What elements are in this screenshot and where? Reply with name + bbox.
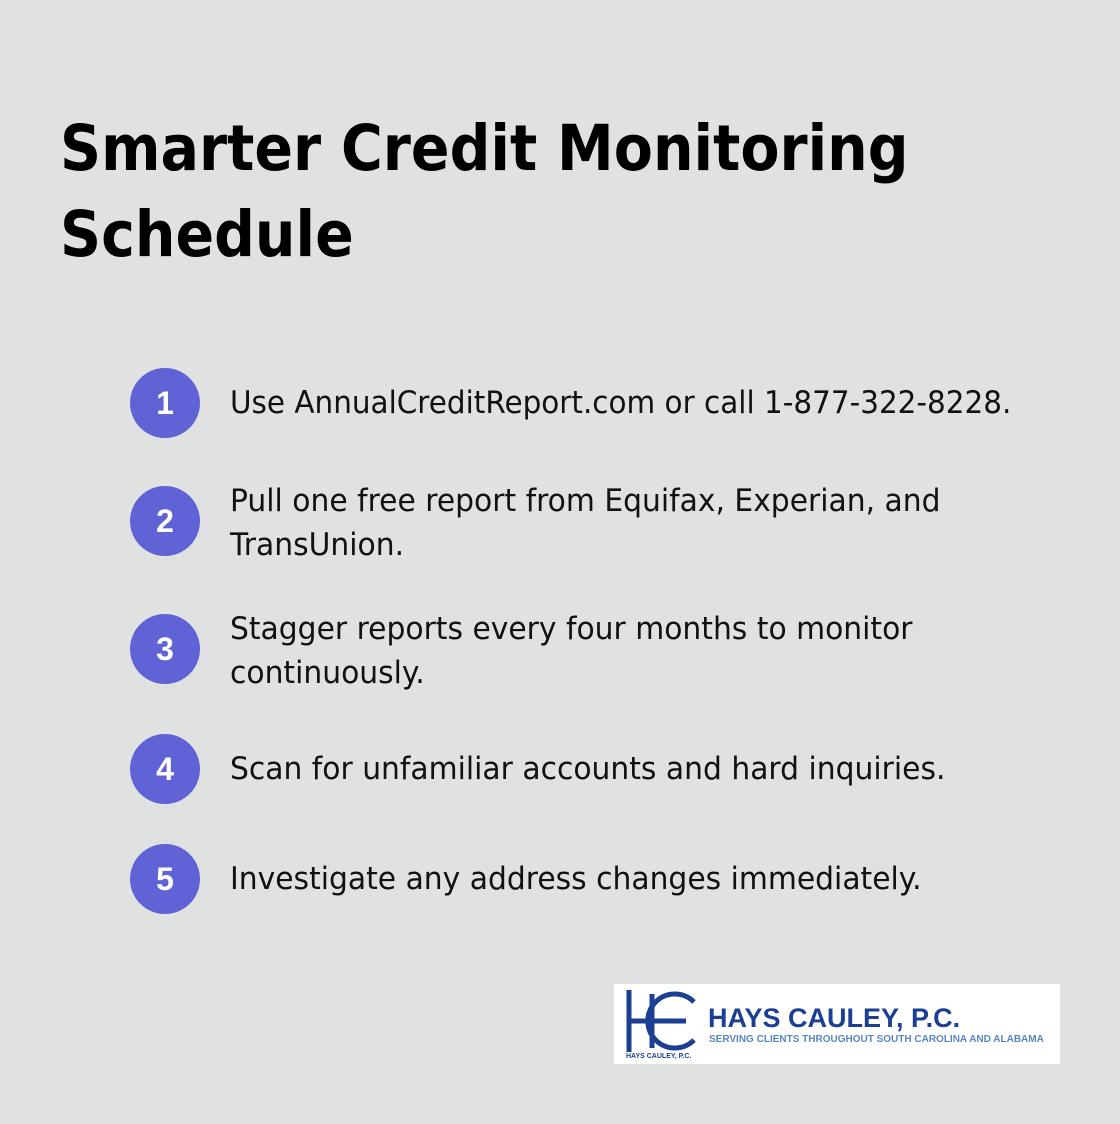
title: Smarter Credit Monitoring [60, 112, 909, 185]
logo: HAYS CAULEY, P.C. [708, 1003, 960, 1033]
step 1 [130, 368, 1011, 438]
step 5: Investigate any address changes immediately. [230, 861, 922, 897]
step 1: Use AnnualCreditReport.com or call 1-877-322-8228. [230, 385, 1011, 421]
step 4: Scan for unfamiliar accounts and hard inquiries. [230, 751, 945, 787]
step 4: 4 [156, 751, 174, 787]
logo [614, 984, 1060, 1064]
step 3: 3 [156, 631, 174, 667]
step 4 [130, 734, 945, 804]
step 3: Stagger reports every four months to monitor continuously. [230, 611, 913, 691]
title: Schedule [60, 198, 354, 271]
logo: HAYS CAULEY, P.C. [626, 1053, 691, 1060]
step 5 [130, 844, 922, 914]
title [60, 112, 909, 271]
step 2: 2 [156, 503, 174, 539]
icon: HC monogram [626, 990, 696, 1052]
step 2: Pull one free report from Equifax, Experian, and TransUnion. [230, 483, 941, 563]
step 5: 5 [156, 861, 174, 897]
logo: SERVING CLIENTS THROUGHOUT SOUTH CAROLINA AND ALABAMA [709, 1034, 1044, 1045]
step 1: 1 [156, 385, 174, 421]
